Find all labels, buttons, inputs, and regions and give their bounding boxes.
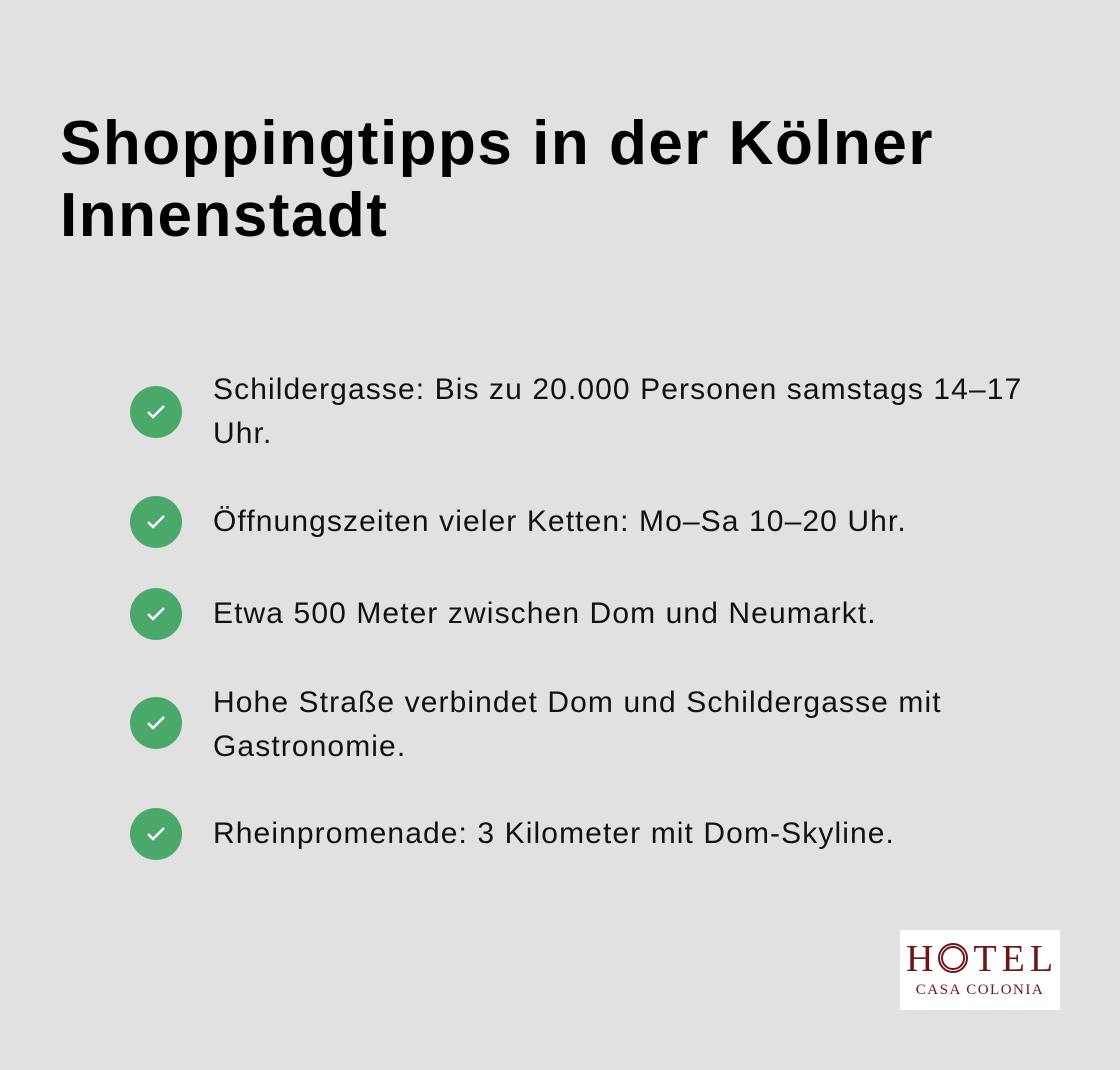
item 2 [130, 496, 907, 548]
icon: check [130, 588, 182, 640]
text: Rheinpromenade: 3 Kilometer mit Dom-Skyline. [213, 817, 895, 850]
text: Hohe Straße verbindet Dom und Schildergasse mit Gastronomie. [213, 686, 942, 763]
icon: check [130, 496, 182, 548]
icon: check [130, 808, 182, 860]
text: Schildergasse: Bis zu 20.000 Personen samstags 14–17 Uhr. [213, 373, 1022, 450]
logo: H TEL [906, 938, 1058, 980]
item 4 [130, 686, 942, 763]
logo: CASA COLONIA [916, 982, 1044, 998]
text: Öffnungszeiten vieler Ketten: Mo–Sa 10–20 Uhr. [213, 505, 907, 538]
item 1 [130, 373, 1022, 450]
item 5 [130, 808, 895, 860]
icon: check [130, 386, 182, 438]
text: Etwa 500 Meter zwischen Dom und Neumarkt. [213, 597, 877, 630]
title: Shoppingtipps in der Kölner Innenstadt [60, 109, 934, 250]
item 3 [130, 588, 877, 640]
icon: check [130, 697, 182, 749]
logo [900, 930, 1060, 1010]
